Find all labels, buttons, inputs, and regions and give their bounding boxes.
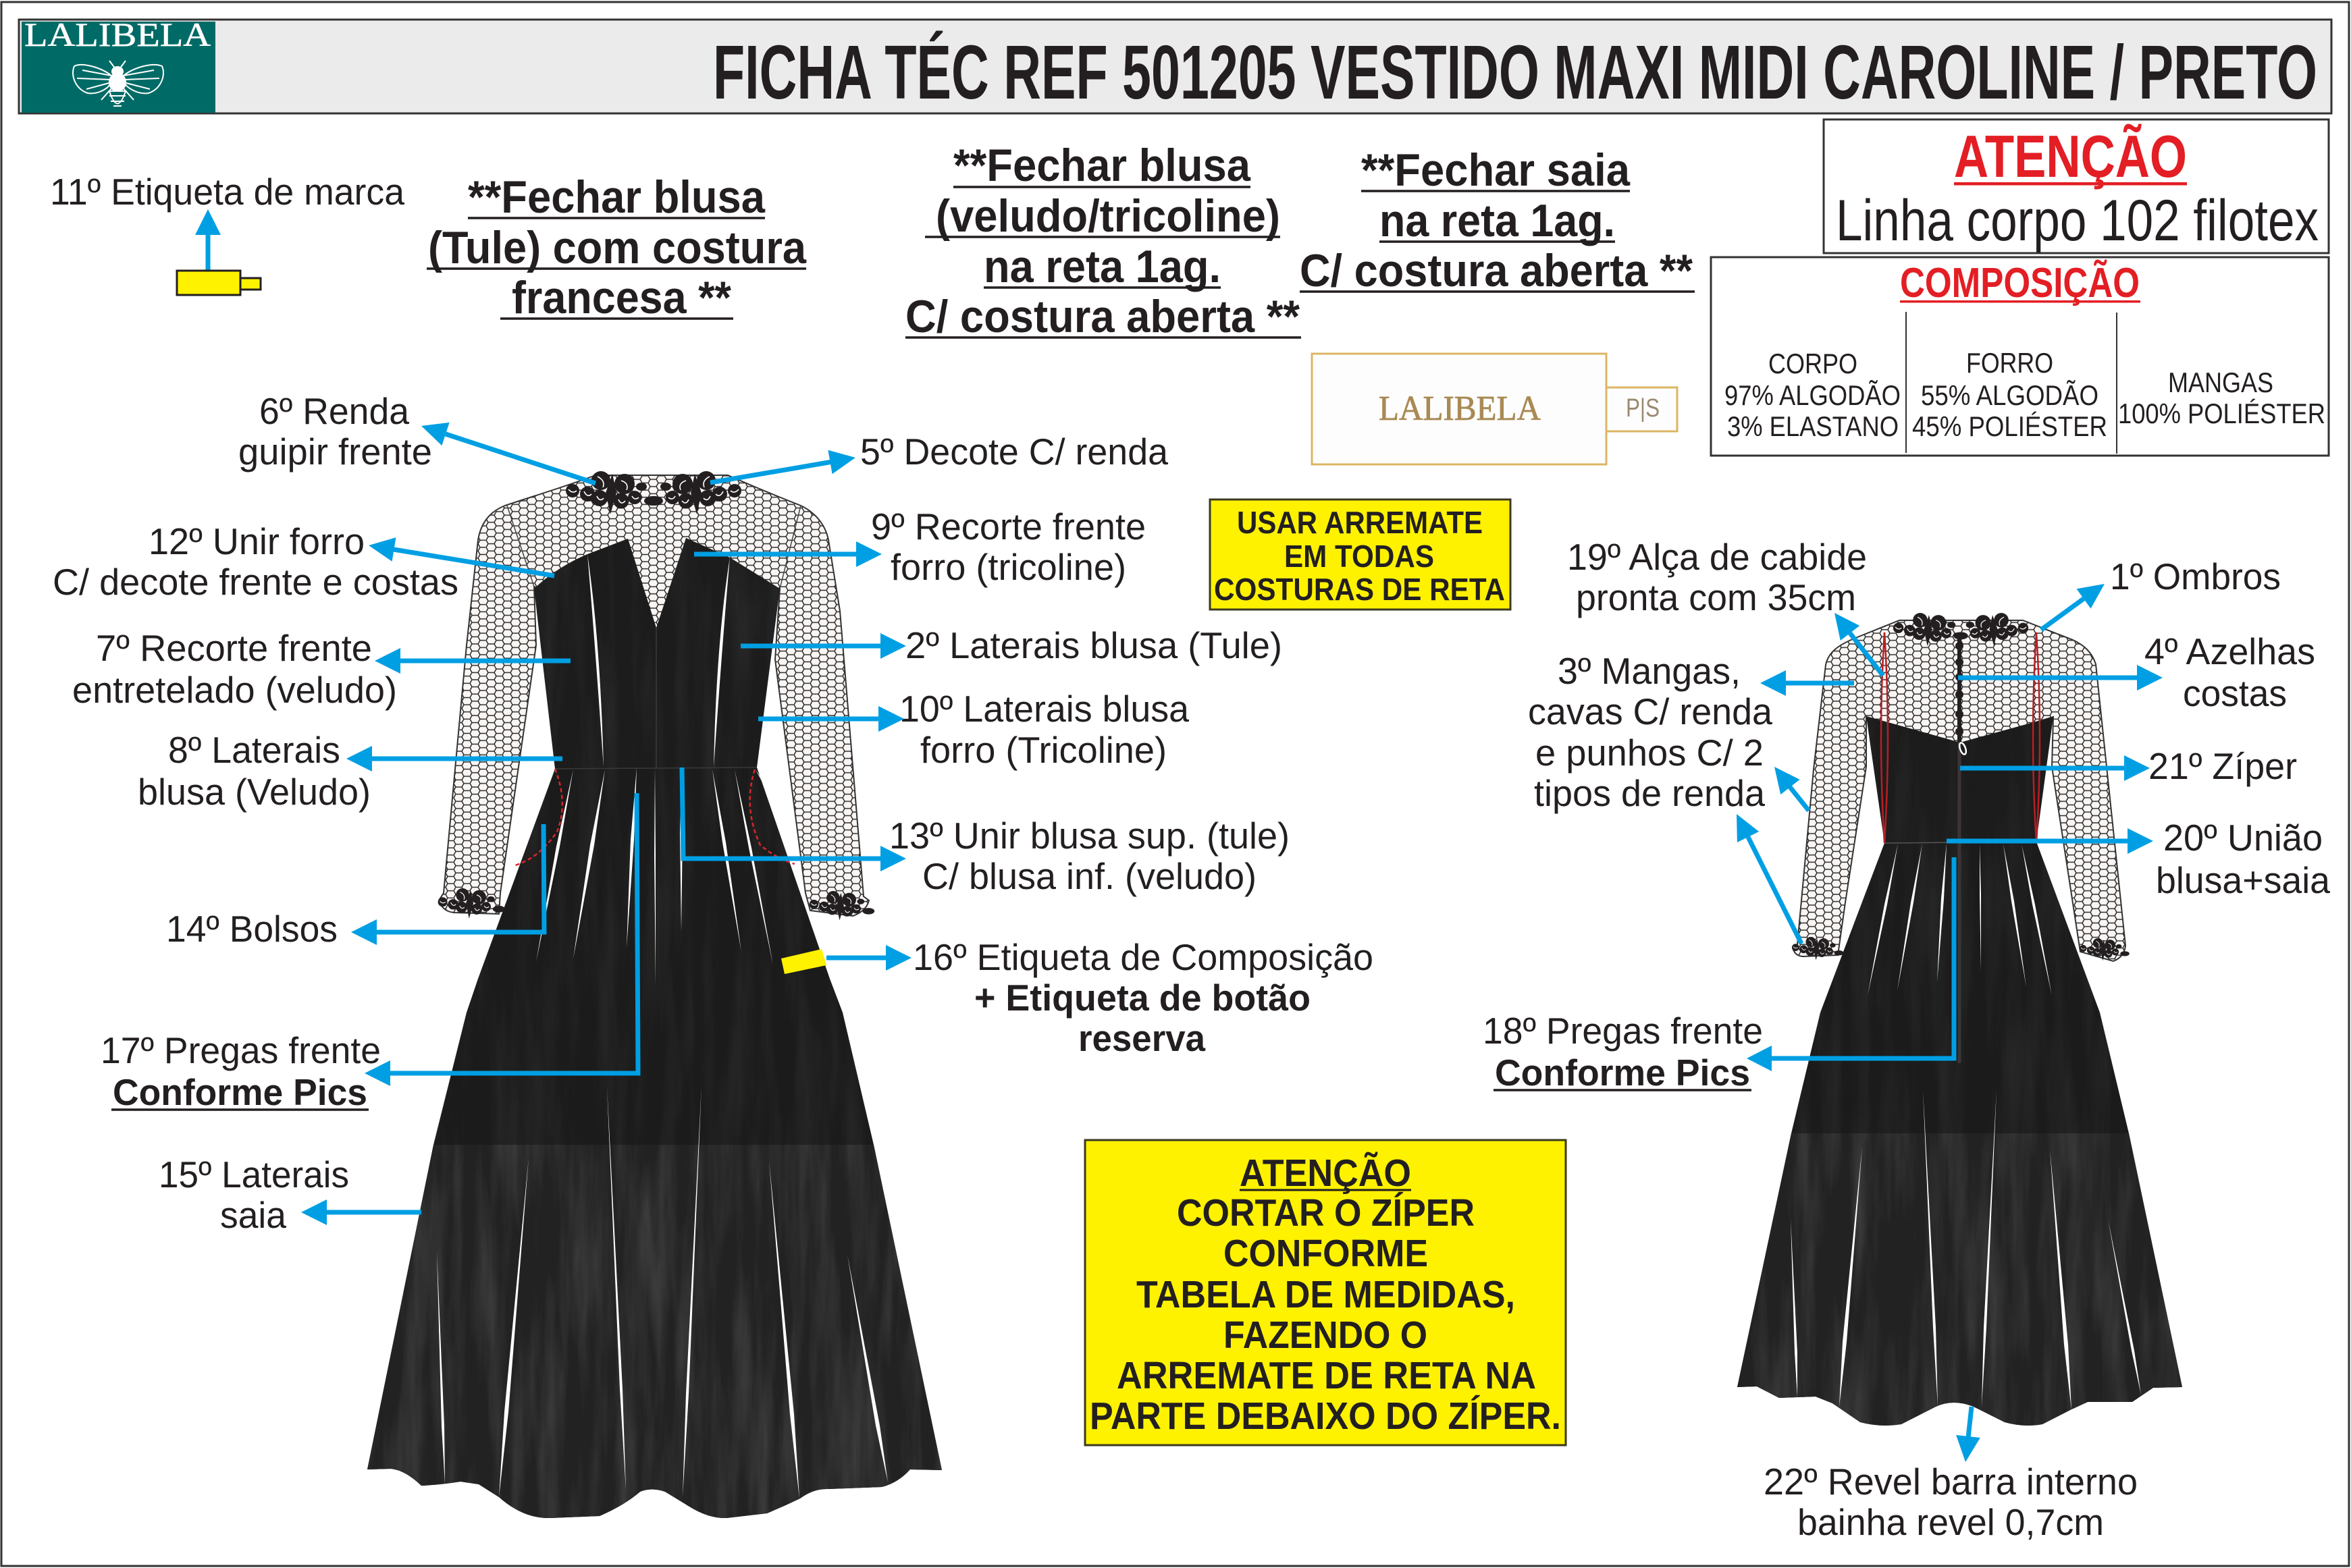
back buttons placket <box>1955 634 1967 755</box>
dress: front view <box>365 471 945 1523</box>
callout: 4º azelhas costas <box>1958 630 2315 714</box>
callout: 10º laterais blusa forro: forro (Tricoline) <box>920 729 1167 771</box>
arrow: laterais saia <box>301 1199 421 1225</box>
callout box: atenção cortar o zíper: ATENÇÃO <box>1240 1152 1411 1195</box>
callout: 22º revel barra <box>1764 1407 2138 1543</box>
brand label sample: P|S <box>1626 394 1660 423</box>
note: fechar blusa tule: (Tule) com costura <box>428 222 807 273</box>
note: fechar blusa veludo/tricoline: (veludo/tricoline) <box>936 190 1280 242</box>
note: fechar blusa veludo/tricoline: **Fechar blusa <box>953 140 1251 191</box>
column: corpo: CORPO <box>1768 348 1857 379</box>
back lower skirt texture <box>1735 1133 2184 1430</box>
callout: 14º bolsos <box>166 824 544 950</box>
note: fechar saia <box>1300 144 1695 296</box>
callout: 22º revel barra: bainha revel 0,7cm <box>1797 1501 2104 1543</box>
callout box: atenção cortar o zíper <box>1085 1140 1566 1445</box>
column: corpo: 97% ALGODÃO <box>1724 379 1901 411</box>
panel: composição <box>1711 257 2329 456</box>
note: fechar saia: **Fechar saia <box>1361 144 1631 196</box>
callout: 4º azelhas costas: costas <box>2183 672 2287 714</box>
callout: 19º alça de cabide <box>1567 536 1883 676</box>
front skirt <box>367 767 942 1518</box>
callout box: atenção cortar o zíper: ARREMATE DE RETA NA <box>1117 1354 1536 1397</box>
callout: 13º unir blusa <box>682 767 1290 897</box>
arrow: laterais forro <box>758 706 904 732</box>
arrow: laterais veludo <box>346 746 562 772</box>
icon: bee <box>73 61 163 106</box>
front bodice <box>534 538 780 769</box>
front tulle yoke and sleeves <box>439 475 869 916</box>
callout box: atenção cortar o zíper: PARTE DEBAIXO DO ZÍPER. <box>1090 1395 1561 1438</box>
callout: 10º laterais blusa forro <box>758 688 1189 771</box>
heading: composição: COMPOSIÇÃO <box>1900 260 2140 306</box>
callout box: atenção cortar o zíper: CORTAR O ZÍPER <box>1177 1191 1475 1235</box>
callout: 7º recorte frente entretelado: entretelado (veludo) <box>72 669 397 711</box>
callout: 8º laterais blusa veludo <box>138 729 562 813</box>
arrow: unir blusa <box>682 767 906 871</box>
back right cuff lace <box>2080 938 2130 961</box>
column: forro <box>1912 347 2107 442</box>
front lower skirt texture <box>365 1145 945 1523</box>
callout: 18º pregas frente: 18º Pregas frente <box>1483 1010 1763 1052</box>
front pleats <box>437 554 888 1498</box>
callout: 22º revel barra: 22º Revel barra interno <box>1764 1461 2138 1503</box>
callout: 18º pregas frente: Conforme Pics <box>1495 1052 1750 1093</box>
callout: 9º recorte frente forro <box>694 506 1146 588</box>
callout: 5º decote c/ renda <box>710 431 1168 483</box>
callout: 6º renda guipir frente: guipir frente <box>238 431 432 472</box>
panel: atenção linha <box>1824 119 2329 253</box>
callout: 8º laterais blusa veludo: 8º Laterais <box>168 729 340 771</box>
arrow: bolsos <box>351 824 544 945</box>
callout: 15º laterais saia <box>159 1154 421 1236</box>
note: fechar blusa veludo/tricoline: C/ costura aberta ** <box>905 291 1300 342</box>
text: etiqueta de marca: 11º Etiqueta de marca <box>50 171 404 213</box>
callout: 16º etiqueta de composição <box>826 936 1373 1059</box>
callout: 8º laterais blusa veludo: blusa (Veludo) <box>138 771 371 813</box>
front upper texture <box>498 586 856 1145</box>
front left cuff lace <box>438 888 505 919</box>
arrow: alça <box>1834 613 1883 676</box>
callout: 3º mangas: 3º Mangas, <box>1558 650 1741 692</box>
note: fechar blusa veludo/tricoline <box>905 140 1301 342</box>
callout: 15º laterais saia: 15º Laterais <box>159 1154 349 1195</box>
callout: 3º mangas: tipos de renda <box>1534 772 1765 814</box>
callout: 12º unir forro: 12º Unir forro <box>149 520 365 562</box>
arrow: renda guipir <box>421 423 596 483</box>
callout: 6º renda guipir frente: 6º Renda <box>259 390 409 432</box>
column: mangas: MANGAS <box>2168 367 2273 398</box>
callout: 20º união blusa+saia: blusa+saia <box>2156 859 2330 901</box>
callout: 1º ombros: 1º Ombros <box>2110 556 2281 597</box>
arrow: decote <box>710 450 855 483</box>
arrow: pregas frente <box>365 793 638 1086</box>
back bodice <box>1866 716 2053 843</box>
back left cuff lace <box>1792 937 1844 961</box>
column: forro: 55% ALGODÃO <box>1921 379 2098 411</box>
callout: 3º mangas: e punhos C/ 2 <box>1535 732 1764 774</box>
arrow: laterais tule <box>741 633 906 659</box>
callout box: atenção cortar o zíper: FAZENDO O <box>1223 1314 1427 1357</box>
front waist and centre seams <box>555 628 757 769</box>
arrow: recorte entretelado <box>375 648 571 674</box>
note: fechar blusa tule: **Fechar blusa <box>468 171 766 223</box>
arrow: punhos <box>1737 814 1801 944</box>
callout box: atenção cortar o zíper: CONFORME <box>1223 1232 1428 1275</box>
callout: 12º unir forro <box>53 520 554 603</box>
callout: 21º zíper <box>1960 745 2297 787</box>
back skirt <box>1737 842 2182 1426</box>
callout: 2º laterais blusa tule <box>741 624 1282 666</box>
column: mangas: 100% POLIÉSTER <box>2118 398 2325 429</box>
front pockets stitching <box>515 769 795 865</box>
note: fechar saia: C/ costura aberta ** <box>1300 245 1693 296</box>
arrow: azelhas <box>1958 665 2163 691</box>
icon: yellow brand label <box>177 271 261 295</box>
back tulle yoke and sleeves <box>1793 620 2125 961</box>
column: mangas <box>2118 367 2325 429</box>
callout: 2º laterais blusa tule: 2º Laterais blusa (Tule) <box>905 624 1282 666</box>
callout: 20º união blusa+saia: 20º União <box>2163 817 2323 859</box>
arrow: zíper <box>1960 755 2150 781</box>
callout: 7º recorte frente entretelado <box>72 627 571 711</box>
front lace collar <box>566 471 741 514</box>
callout: 10º laterais blusa forro: 10º Laterais blusa <box>899 688 1189 730</box>
callout: 11º etiqueta de marca <box>50 171 404 295</box>
heading: atenção: ATENÇÃO <box>1954 123 2187 190</box>
arrow: pregas frente costas <box>1747 857 1954 1071</box>
callout: 1º ombros <box>2041 556 2281 630</box>
callout box: usar arremate: USAR ARREMATE <box>1237 505 1483 540</box>
callout: 16º etiqueta de composição: reserva <box>1078 1017 1205 1059</box>
front right cuff lace <box>810 891 874 921</box>
arrow: to etiqueta de marca <box>195 209 221 270</box>
callout: 19º alça de cabide: pronta com 35cm <box>1576 576 1856 618</box>
arrow: união <box>1947 828 2153 854</box>
arrow: unir forro <box>369 537 554 576</box>
back pleats <box>1791 843 2141 1410</box>
arrow: recorte forro <box>694 541 882 567</box>
column: forro: FORRO <box>1966 347 2053 379</box>
callout: 20º união blusa+saia <box>1947 817 2330 901</box>
callout: 21º zíper: 21º Zíper <box>2148 745 2297 787</box>
callout: 3º mangas <box>1528 650 1854 944</box>
back zipper <box>1958 742 1961 1063</box>
callout: 5º decote c/ renda: 5º Decote C/ renda <box>860 431 1168 472</box>
brand label sample: LALIBELA <box>1379 389 1541 428</box>
back shoulder darts <box>1881 632 2040 843</box>
column: corpo: 3% ELASTANO <box>1727 410 1899 442</box>
callout: 9º recorte frente forro: forro (tricoline) <box>891 546 1126 588</box>
logo: Lalibela <box>22 16 215 113</box>
back upper texture <box>1805 853 2107 1133</box>
callout box: usar arremate: EM TODAS <box>1284 539 1434 574</box>
callout: 4º azelhas costas: 4º Azelhas <box>2144 630 2315 672</box>
callout: 17º pregas frente <box>101 793 638 1113</box>
column: forro: 45% POLIÉSTER <box>1912 410 2107 442</box>
callout: 16º etiqueta de composição: 16º Etiqueta de Composição <box>913 936 1373 978</box>
callout: 17º pregas frente: Conforme Pics <box>113 1071 367 1113</box>
callout box: atenção cortar o zíper: TABELA DE MEDIDAS, <box>1136 1273 1515 1316</box>
callout: 13º unir blusa: C/ blusa inf. (veludo) <box>922 855 1257 897</box>
note: fechar blusa tule: francesa ** <box>512 272 731 323</box>
callout: 6º renda guipir frente <box>238 390 596 483</box>
dress: back view <box>1735 613 2184 1430</box>
callout: 7º recorte frente entretelado: 7º Recorte frente <box>96 627 372 669</box>
callout: 13º unir blusa: 13º Unir blusa sup. (tule) <box>889 815 1290 857</box>
column: corpo <box>1724 348 1901 442</box>
note: fechar blusa tule <box>427 171 807 323</box>
arrow: ombros <box>2041 584 2105 630</box>
callout: 16º etiqueta de composição: + Etiqueta de botão <box>974 977 1311 1019</box>
note: fechar saia: na reta 1ag. <box>1379 195 1615 246</box>
callout: 18º pregas frente <box>1483 857 1954 1093</box>
logo wordmark: LALIBELA <box>24 16 211 53</box>
callout: 19º alça de cabide: 19º Alça de cabide <box>1567 536 1867 578</box>
arrow: mangas <box>1774 767 1809 811</box>
arrow: cavas <box>1760 670 1854 696</box>
back waist seam <box>1884 842 2036 843</box>
callout: 9º recorte frente forro: 9º Recorte frente <box>871 506 1146 547</box>
callout: 17º pregas frente: 17º Pregas frente <box>101 1029 381 1071</box>
header bar <box>19 16 2331 115</box>
arrow: etiqueta composição <box>826 945 912 971</box>
arrow: revel barra <box>1956 1407 1980 1462</box>
callout: 12º unir forro: C/ decote frente e costas <box>53 561 458 603</box>
back lace collar <box>1893 613 2028 646</box>
callout box: usar arremate: COSTURAS DE RETA <box>1214 572 1505 607</box>
brand label sample <box>1312 354 1677 464</box>
note: fechar blusa veludo/tricoline: na reta 1ag. <box>984 241 1221 292</box>
callout box: usar arremate <box>1210 499 1510 610</box>
callout: 15º laterais saia: saia <box>220 1194 286 1236</box>
yellow composition label <box>781 949 826 974</box>
callout: 14º bolsos: 14º Bolsos <box>166 908 338 950</box>
callout: 3º mangas: cavas C/ renda <box>1528 691 1772 732</box>
